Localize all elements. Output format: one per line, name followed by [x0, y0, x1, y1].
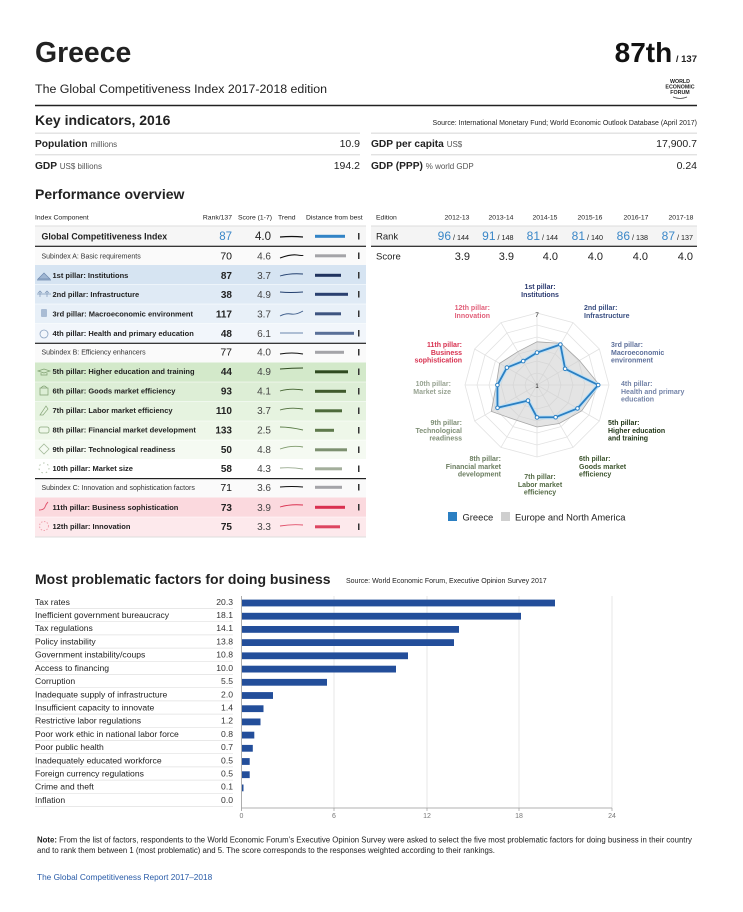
label: 12th pillar: Innovation — [455, 313, 490, 320]
row: 4th pillar: 4th pillar: Health and primary education — [52, 329, 194, 338]
row: 2nd pillar: 2nd pillar: Infrastructure — [52, 290, 139, 299]
row: Subindex A: 4.6 — [257, 252, 271, 262]
row: 7th pillar — [40, 406, 360, 417]
heading: most problematic factors: Most problematic factors for doing business — [35, 571, 331, 587]
edition header: 2014-15 — [533, 214, 558, 222]
title: Greece — [35, 37, 131, 69]
row: 5th pillar: 4.9 — [257, 367, 271, 378]
row: 3rd pillar: 3.7 — [257, 310, 271, 320]
series: Europe and North America — [491, 342, 599, 427]
row: 6th pillar: 4.1 — [257, 386, 271, 398]
factor labels — [35, 597, 179, 805]
edition header: Edition — [376, 214, 397, 222]
row: 5th pillar: 44 — [221, 367, 232, 378]
note — [37, 836, 692, 855]
row: 6th pillar: 93 — [221, 386, 232, 398]
label: 3rd pillar: 3rd pillar: — [611, 342, 643, 349]
row: 8th pillar: 133 — [215, 426, 232, 436]
source note: survey: Source: World Economic Forum, Executive Opinion Survey 2017 — [346, 578, 547, 585]
label: 6th pillar: Goods market — [579, 464, 627, 471]
row: 9th pillar: 4.8 — [257, 445, 271, 456]
label: 9th pillar: 9th pillar: — [430, 420, 462, 427]
row: 6th pillar — [40, 386, 360, 398]
row: 1st pillar: 3.7 — [257, 271, 271, 282]
rank row: Rank — [376, 232, 398, 242]
label: 11th pillar: Business — [431, 350, 462, 357]
label: 12th pillar: 12th pillar: — [455, 305, 490, 312]
chart grid and axis: 24 — [608, 813, 616, 820]
label: 5th pillar: Higher education — [608, 428, 665, 435]
label: 2nd pillar: Infrastructure — [584, 313, 630, 320]
factor labels: Crime and theft — [35, 782, 94, 792]
factor values: 0.8 — [221, 729, 233, 739]
icon: labor market — [40, 406, 48, 415]
row: 2nd pillar: 4.9 — [257, 290, 271, 301]
value: GDP: 194.2 — [334, 160, 360, 172]
factor values: 5.5 — [221, 676, 233, 686]
chart grid and axis: 18 — [515, 813, 523, 820]
factor values: 20.3 — [216, 597, 233, 607]
row: Subindex B — [42, 346, 360, 358]
label: 9th pillar: readiness — [429, 436, 462, 442]
label: 5th pillar: 5th pillar: — [608, 420, 640, 427]
row: Global Competitiveness Index: 4.0 — [255, 231, 271, 243]
row: 4th pillar: 48 — [221, 329, 232, 340]
row: 2nd pillar — [37, 290, 360, 301]
factor labels: Inadequate supply of infrastructure — [35, 689, 168, 699]
label: 3rd pillar: Macroeconomic — [611, 350, 664, 357]
row: Subindex B: Subindex B: Efficiency enhancers — [42, 350, 146, 356]
indicator: GDP per capita: GDP per capita US$ — [371, 139, 463, 150]
chart grid and axis: 0 — [240, 813, 244, 820]
icon: infrastructure — [37, 291, 51, 297]
radar chart — [413, 284, 685, 522]
factor labels: Tax rates — [35, 597, 70, 607]
factor labels: Foreign currency regulations — [35, 768, 144, 778]
chart grid and axis: 12 — [423, 813, 431, 820]
label: 4th pillar: Health and primary — [621, 389, 685, 396]
radar grid — [465, 313, 609, 457]
row: 10th pillar: 4.3 — [257, 464, 271, 475]
indicator: population: Population millions — [35, 139, 117, 150]
row: Subindex B: 4.0 — [257, 348, 271, 358]
row: Subindex A: Subindex A: Basic requirements — [42, 254, 141, 260]
row: Global Competitiveness Index: Global Competitiveness Index — [42, 232, 167, 242]
icon: innovation — [40, 522, 48, 530]
icon: technological readiness — [39, 444, 49, 454]
legend — [448, 512, 626, 522]
factor values: 1.2 — [221, 716, 233, 726]
factor labels: Poor public health — [35, 742, 104, 752]
row rules — [35, 608, 233, 806]
label: 4th pillar: 4th pillar: — [621, 381, 653, 388]
icon: World Economic Forum logo: FORUM — [670, 90, 690, 96]
note: and to rank them between 1 (most problematic) and 5. The score corresponds to the responses weighted according to their rankings. — [37, 846, 495, 855]
label: 11th pillar: sophistication — [415, 358, 462, 364]
row: 2nd pillar: 38 — [221, 290, 232, 301]
label: 5th pillar: and training — [608, 436, 648, 442]
factor labels: Inadequately educated workforce — [35, 755, 162, 765]
label: 10th pillar: 10th pillar: — [416, 381, 451, 388]
edition header: 2017-18 — [669, 214, 694, 222]
row: 1st pillar — [37, 271, 360, 282]
row: 9th pillar: 9th pillar: Technological readiness — [52, 445, 175, 454]
icon: goods market — [40, 386, 48, 395]
label: 10th pillar: Market size — [413, 389, 451, 396]
row: Subindex C — [42, 482, 360, 494]
factor values: 13.8 — [216, 636, 233, 646]
panel: index component table — [35, 214, 366, 538]
row: 10th pillar: 10th pillar: Market size — [52, 464, 133, 473]
row: 9th pillar: 50 — [221, 445, 232, 456]
score row — [376, 251, 693, 263]
factor values: 0.7 — [221, 742, 233, 752]
table header — [35, 214, 363, 222]
bar chart: problematic factors — [35, 596, 616, 820]
edition header: 2016-17 — [624, 214, 649, 222]
row: 4th pillar: 6.1 — [257, 329, 271, 340]
row: 3rd pillar: 117 — [216, 310, 232, 320]
icon: macroeconomic environment — [41, 309, 47, 317]
row: 12th pillar — [40, 522, 360, 533]
row: 8th pillar: 2.5 — [257, 426, 271, 436]
factor values: 10.8 — [216, 650, 233, 660]
icon: market size — [39, 463, 49, 473]
row: Subindex C: 71 — [220, 482, 232, 494]
factor labels: Inflation — [35, 795, 65, 805]
row: 8th pillar: 8th pillar: Financial market development — [52, 426, 196, 434]
icon: World Economic Forum logo: WORLD — [670, 79, 690, 85]
indicator: GDP: GDP US$ billions — [35, 161, 102, 172]
row: Subindex B: 77 — [220, 346, 232, 358]
label: 9th pillar: Technological — [415, 428, 462, 435]
label: 4th pillar: education — [621, 396, 654, 404]
factor labels: Policy instability — [35, 636, 96, 646]
factor labels: Insufficient capacity to innovate — [35, 702, 154, 712]
factor labels: Restrictive labor regulations — [35, 716, 141, 726]
bars — [242, 600, 555, 791]
table header: Distance from best — [306, 214, 363, 222]
factor values: 18.1 — [216, 610, 233, 620]
row: 8th pillar — [39, 426, 360, 436]
icon: World Economic Forum logo — [665, 79, 695, 98]
label: 3rd pillar: environment — [611, 358, 654, 364]
value: population: 10.9 — [340, 138, 360, 150]
score row: Score — [376, 252, 401, 262]
row: 7th pillar: 3.7 — [257, 406, 271, 417]
edition header: 2015-16 — [578, 214, 603, 222]
label: 7th pillar: efficiency — [524, 490, 556, 496]
row: Global Competitiveness Index — [42, 231, 360, 243]
row: 11th pillar: 11th pillar: Business sophistication — [52, 503, 179, 512]
rank row: 96 / 144 — [438, 229, 469, 243]
row: 6th pillar: 6th pillar: Goods market efficiency — [52, 386, 176, 396]
icon: business sophistication — [39, 502, 48, 510]
label: 2nd pillar: 2nd pillar: — [584, 305, 617, 312]
factor values: 0.1 — [221, 782, 233, 792]
rank row: 91 / 148 — [482, 229, 514, 243]
value: GDP PPP: 0.24 — [677, 160, 697, 172]
row: Global Competitiveness Index: 87 — [219, 231, 232, 243]
factor values: 0.0 — [221, 795, 233, 805]
rank headline: 87th / 137 — [615, 37, 697, 68]
label: 8th pillar: development — [458, 472, 502, 478]
panel: key indicators — [35, 112, 697, 172]
factor labels: Corruption — [35, 676, 75, 686]
table header: Index Component — [35, 214, 89, 222]
row: 10th pillar — [39, 463, 360, 475]
radar scale labels — [535, 312, 539, 390]
row: 11th pillar: 73 — [221, 503, 232, 514]
label: 6th pillar: 6th pillar: — [579, 456, 611, 463]
rank row: 86 / 138 — [617, 229, 648, 243]
radar scale labels: 1 — [535, 384, 539, 390]
factor labels: Inefficient government bureaucracy — [35, 610, 170, 620]
row: 3rd pillar — [41, 309, 360, 320]
factor values: 0.5 — [221, 768, 233, 778]
row: Subindex A — [42, 250, 360, 262]
score row: 4.0 — [633, 251, 648, 263]
factor values — [216, 597, 233, 805]
row: 7th pillar: 110 — [216, 406, 232, 417]
legend: Greece — [462, 512, 493, 522]
label: 8th pillar: 8th pillar: — [469, 456, 501, 463]
label: 7th pillar: 7th pillar: — [524, 474, 556, 481]
row: Subindex C: 3.6 — [257, 483, 271, 494]
row: 12th pillar: 3.3 — [257, 522, 271, 533]
row: 12th pillar: 75 — [221, 522, 232, 533]
label: 1st pillar: Institutions — [521, 292, 559, 299]
label: 11th pillar: 11th pillar: — [427, 342, 462, 349]
label: 6th pillar: efficiency — [579, 472, 611, 478]
row: 7th pillar: 7th pillar: Labor market efficiency — [52, 406, 173, 415]
series: Greece — [496, 343, 600, 419]
factor values: 14.1 — [216, 623, 233, 633]
row: 1st pillar: 1st pillar: Institutions — [52, 271, 128, 280]
heading: performance overview: Performance overview — [35, 186, 185, 202]
rank row: 81 / 144 — [527, 229, 558, 243]
edition header — [376, 214, 694, 222]
score row: 3.9 — [499, 251, 514, 263]
score row: 4.0 — [588, 251, 603, 263]
factor labels: Access to financing — [35, 663, 109, 673]
row: 9th pillar — [39, 444, 360, 456]
row: 5th pillar — [38, 367, 360, 378]
heading: key indicators: Key indicators, 2016 — [35, 112, 171, 128]
radar scale labels: 7 — [535, 312, 539, 319]
subtitle: The Global Competitiveness Index 2017-2018 edition — [35, 82, 327, 96]
factor values: 1.4 — [221, 702, 233, 712]
row: 10th pillar: 58 — [221, 464, 232, 475]
rank row: 81 / 140 — [572, 229, 603, 243]
score row: 4.0 — [678, 251, 693, 263]
icon: financial market — [39, 427, 49, 433]
edition header: 2013-14 — [489, 214, 514, 222]
factor labels: Government instability/coups — [35, 650, 145, 660]
score row: 4.0 — [543, 251, 558, 263]
table header: Trend — [278, 214, 296, 222]
note: Note: From the list of factors, respondents to the World Economic Forum’s Executive Opinion Survey were asked to select the five most problematic factors for doing business in their country — [37, 836, 692, 844]
table header: Score (1-7) — [238, 214, 272, 222]
row: 12th pillar: 12th pillar: Innovation — [52, 522, 131, 531]
row: 5th pillar: 5th pillar: Higher education and training — [52, 367, 195, 376]
score row: 3.9 — [455, 251, 470, 263]
legend: Europe and North America — [515, 512, 626, 522]
chart grid and axis — [240, 596, 616, 820]
panel: edition history table — [371, 214, 697, 263]
factor values: 10.0 — [216, 663, 233, 673]
rank row: 87 / 137 — [662, 229, 693, 243]
icon: health — [40, 330, 48, 338]
factor values: 0.5 — [221, 755, 233, 765]
label: 8th pillar: Financial market — [446, 464, 502, 471]
value: GDP per capita: 17,900.7 — [656, 138, 697, 150]
row: 11th pillar: 3.9 — [257, 503, 271, 514]
rank row — [376, 229, 693, 243]
factor labels: Tax regulations — [35, 623, 93, 633]
indicator: GDP PPP: GDP (PPP) % world GDP — [371, 161, 474, 172]
row: 1st pillar: 87 — [221, 271, 232, 282]
source note: Source: International Monetary Fund; World Economic Outlook Database (April 2017) — [433, 120, 697, 127]
row: Subindex C: Subindex C: Innovation and sophistication factors — [42, 485, 195, 492]
factor labels: Poor work ethic in national labor force — [35, 729, 179, 739]
row: 3rd pillar: 3rd pillar: Macroeconomic environment — [52, 310, 193, 318]
row: 11th pillar — [39, 502, 360, 514]
table header: Rank/137 — [203, 214, 232, 222]
footer: The Global Competitiveness Report 2017–2018 — [37, 872, 213, 882]
row: 4th pillar — [40, 329, 360, 340]
label: 1st pillar: 1st pillar: — [524, 284, 556, 291]
factor values: 2.0 — [221, 689, 233, 699]
chart grid and axis: 6 — [332, 813, 336, 820]
icon: education — [38, 369, 50, 375]
edition header: 2012-13 — [445, 214, 470, 222]
row: Subindex A: 70 — [220, 250, 232, 262]
icon: institutions — [37, 273, 51, 280]
icon: World Economic Forum logo: ECONOMIC — [665, 84, 695, 90]
label: 7th pillar: Labor market — [518, 482, 563, 489]
